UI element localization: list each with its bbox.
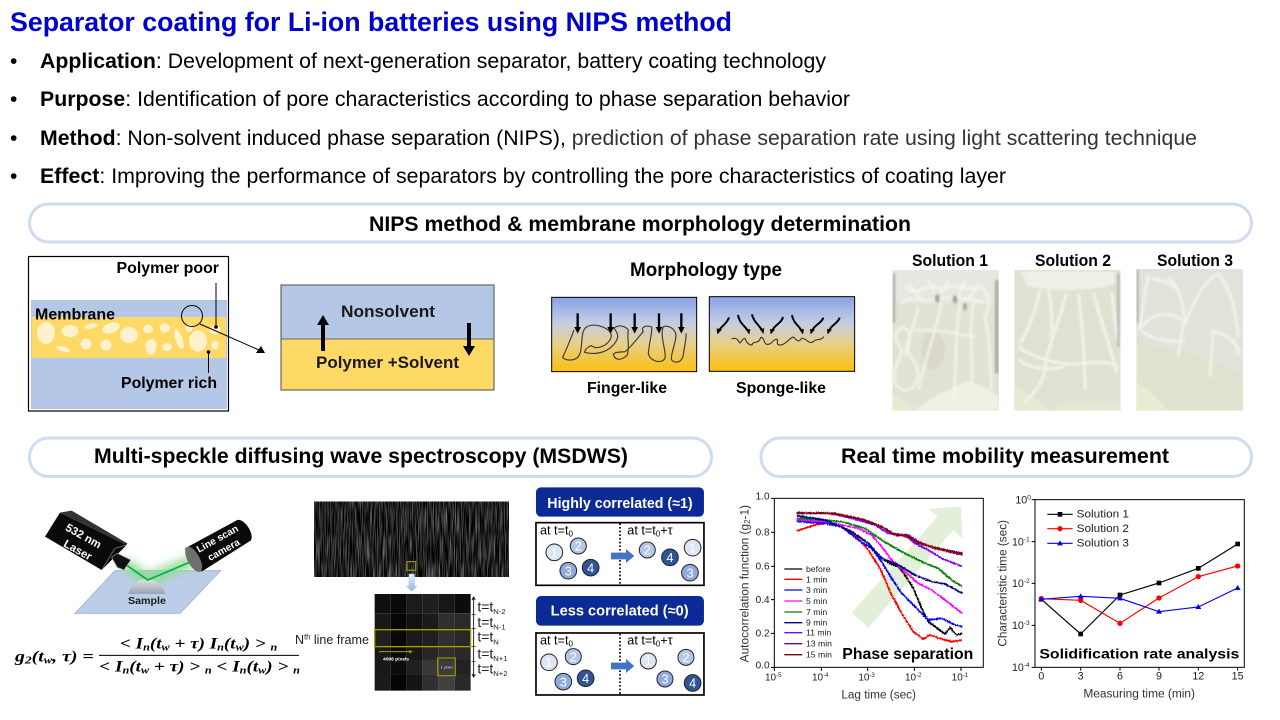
time labels: t=t [477,645,493,661]
correlation equation: < I [212,659,241,676]
y tick labels: 10 [1012,578,1024,590]
label: less correlated: Less correlated (≈0) [551,604,689,620]
correlation equation: n [143,642,150,653]
correlation equation: < I [99,659,118,676]
x tick labels: -1 [963,673,969,679]
pixel grid [375,594,471,691]
correlation equation: g [15,649,23,666]
correlation equation: , τ) = [51,649,94,666]
axes [1032,500,1244,671]
bullet: method: • [10,127,17,150]
light glow [124,560,195,580]
solution labels: Solution 1 [912,252,988,270]
arrow: phase separation trend [852,507,962,628]
correlation equation: ) > [264,659,293,676]
x tick labels: 0 [1038,671,1044,683]
chart: characteristic time [995,494,1244,701]
box: highly correlated particles: 1 [551,546,558,560]
correlation equation: (t [32,649,45,666]
camera body: Line scan [195,523,241,555]
box: less correlated particles: 2 [682,651,689,665]
box: less correlated particles: 3 [560,675,567,689]
correlation equation: w [162,642,170,653]
axis titles: Measuring time (min) [1083,687,1195,701]
laser body: Laser [61,538,94,564]
camera body [182,520,252,575]
y tick labels: -3 [1024,620,1030,627]
label: highly correlated: Highly correlated (≈1) [547,496,693,512]
x tick labels: 10 [905,673,916,684]
axis titles: Lag time (sec) [841,687,916,701]
finger-like morphology [552,297,697,372]
box: highly correlated particles: 3 [686,566,693,580]
sample droplet [128,579,165,594]
y tick labels: 0 [1027,494,1031,501]
bullet: purpose: • [10,88,17,111]
axis titles: 2 [743,519,752,524]
membrane diagram: Polymer rich [121,375,217,392]
legend: before [806,564,831,574]
solution labels: Solution 3 [1157,252,1233,270]
correlation equation: (t [224,635,236,652]
y tick labels: -4 [1024,662,1030,669]
correlation equation: n [122,666,130,677]
correlation equation: n [271,642,278,653]
solution labels: Solution 2 [1035,252,1111,270]
x tick labels: -3 [869,673,875,679]
box: highly correlated particles: 4 [666,551,673,565]
sample label: Sample [128,596,166,607]
x tick labels: 10 [812,673,823,684]
y tick labels: -2 [1024,578,1030,585]
section heading: NIPS method [30,204,1252,242]
correlation panels [536,487,704,695]
time labels: N-2 [493,607,506,616]
box: highly correlated particles: at t=t [627,523,656,537]
x tick labels: 6 [1117,671,1123,683]
photo: solution 2 [1014,270,1121,411]
correlation equation: + τ) I [170,635,218,652]
y tick labels: 10 [1012,620,1024,632]
axis titles: -1) [737,505,751,519]
time brackets [472,597,476,677]
section heading: NIPS method: NIPS method & membrane morphology determination [369,213,911,236]
box: less correlated particles: 2 [570,650,577,664]
x tick labels: 12 [1192,671,1204,683]
y tick labels: 0.8 [756,528,770,539]
section heading: mobility: Real time mobility measurement [841,445,1169,468]
Nth line frame label: line frame [310,632,369,647]
y tick labels: 0.4 [756,595,770,606]
legend: 3 min [806,585,827,595]
section heading: MSDWS [30,438,712,476]
x tick labels: 9 [1156,671,1162,683]
time labels: N [493,637,499,646]
legend: 5 min [806,596,827,606]
sponge-like morphology [709,297,855,371]
MSDWS setup illustration [45,511,252,613]
chart caption: Solidification rate analysis [1039,645,1240,661]
y tick labels: 10 [1012,536,1024,548]
x tick labels: 15 [1232,671,1244,683]
box: less correlated particles: 0 [656,639,661,648]
y tick labels: 0.6 [756,562,770,573]
correlation equation: (t [129,659,142,676]
photo: solution 3 [1136,269,1243,411]
membrane diagram: Membrane [35,306,115,324]
correlation equation: n [240,666,247,677]
correlation equation: (t [150,635,162,652]
correlation equation: n [205,666,212,677]
selected region marker [407,562,416,570]
bullet: effect: Effect: Improving the performance of separators by controlling the pore characteristics of coating layer [40,165,1006,188]
legend [784,564,832,660]
y tick labels: 0.0 [756,661,770,672]
title: Separator coating for Li-ion batteries using NIPS method [10,7,732,37]
x tick labels: -5 [776,673,782,679]
box: highly correlated particles: 0 [656,529,661,538]
photo: solution 1 [892,270,999,411]
solution labels [912,252,1233,270]
box: less correlated particles: 1 [545,656,552,670]
x tick labels [1038,671,1244,683]
legend: 7 min [806,607,827,617]
laser beam [124,560,195,580]
time labels: N-1 [493,623,506,632]
box: less correlated particles: 3 [661,673,668,687]
correlation equation: w [258,666,267,677]
interface diagram: Nonsolvent [341,303,436,321]
pixel grid: 1 pixel [441,664,453,669]
correlation equation: < I [120,635,139,652]
box: less correlated particles: 1 [645,655,652,669]
speckle image [314,502,509,577]
curves [797,513,962,642]
axes [771,498,983,671]
bullet: method: Method: Non-solvent induced phase separation (NIPS), prediction of phase separation rate using light scattering technique [40,127,1197,150]
time labels: N+2 [493,669,508,678]
chart: autocorrelation [737,492,983,701]
box: less correlated particles [536,633,704,695]
x tick labels: -2 [916,673,922,679]
x tick labels [765,673,969,684]
axis titles: Characteristic time (sec) [995,520,1009,647]
correlation equation: ) > [241,635,271,652]
y tick labels: 10 [1012,662,1024,674]
section heading: mobility [761,438,1252,476]
box: less correlated particles: +τ [660,633,673,647]
box: less correlated particles: at t=t [540,633,568,647]
series: solution 3 [1038,585,1241,614]
speckle pattern panel [295,502,509,691]
box: highly correlated particles: at t=t [540,523,568,537]
box: less correlated particles: at t=t [627,633,656,647]
y tick labels [1012,494,1031,674]
label: highly correlated [536,487,704,517]
box: highly correlated particles: 0 [568,529,573,538]
camera body: camera [206,537,242,564]
legend: Solution 2 [1077,523,1129,535]
interface diagram [281,285,494,390]
correlation equation: w [44,656,53,667]
correlation equation: n [293,666,301,677]
arrow: magnify [406,574,417,591]
bullet: purpose: Purpose: Identification of pore characteristics according to phase separation behavior [40,88,850,111]
morphology captions: Sponge-like [736,380,826,397]
box: less correlated particles: 4 [582,672,589,686]
box: highly correlated particles: 3 [565,564,572,578]
morphology captions [587,380,826,397]
time labels: t=t [477,660,493,676]
legend: 13 min [806,639,832,649]
legend: 1 min [806,574,827,584]
x tick labels: 10 [858,673,869,684]
Nth line frame label: th [304,632,310,641]
bullet: application: • [10,50,17,73]
box: less correlated particles: 0 [568,639,573,648]
label: less correlated [536,596,704,626]
morphology type heading: Morphology type [630,260,782,281]
correlation equation [14,635,301,677]
axis titles [995,520,1195,701]
membrane diagram: Polymer poor [116,260,219,277]
box: highly correlated particles: +τ [660,523,673,537]
legend: Solution 1 [1077,509,1129,521]
time labels: t=t [477,614,493,630]
series: solution 2 [1039,563,1240,626]
legend: 9 min [806,618,827,628]
morphology captions: Finger-like [587,380,667,397]
laser body [45,511,131,570]
correlation equation: w [236,642,244,653]
time labels [477,598,508,678]
interface diagram: Polymer +Solvent [316,354,460,372]
correlation equation: 2 [24,656,32,667]
box: highly correlated particles: 1 [689,541,696,555]
axis titles [737,505,916,701]
legend: 11 min [806,628,832,638]
correlation equation: n [217,642,224,653]
membrane diagram [28,256,228,411]
x tick labels: 10 [952,673,963,684]
sample stage [75,571,221,613]
y tick labels [756,492,770,672]
bullet: effect: • [10,165,17,188]
time labels: N+1 [493,654,508,663]
time labels: t=t [477,598,493,614]
box: highly correlated particles [536,523,704,585]
chart caption: Phase separation [842,646,973,663]
box: highly correlated particles: 2 [644,544,651,558]
laser body: 532 nm [63,522,103,551]
bullet: application: Application: Development of next-generation separator, battery coating technology [40,50,826,73]
arrow: zoom to interface [200,324,265,353]
y tick labels: 0.2 [756,629,770,640]
y tick labels: 1.0 [756,492,770,503]
correlation equation: w [141,666,150,677]
series: solution 1 [1039,542,1240,636]
y tick labels: 10 [1015,494,1027,506]
pixel grid: 4096 pixels [383,656,410,661]
bullet list [10,50,1197,188]
correlation equation: (t [246,659,259,676]
time labels: t=t [477,629,493,645]
Nth line frame label: N [295,632,305,647]
box: highly correlated particles: 2 [575,540,582,554]
legend [1047,509,1129,550]
x tick labels: -4 [823,673,829,679]
box: highly correlated particles: 4 [587,561,594,575]
y tick labels: -1 [1024,536,1030,543]
legend: Solution 3 [1077,538,1129,550]
section heading: MSDWS: Multi-speckle diffusing wave spectroscopy (MSDWS) [94,445,628,468]
axis titles: Autocorrelation function (g [737,522,751,662]
box: less correlated particles: 4 [689,677,696,691]
x tick labels: 3 [1078,671,1084,683]
legend: 15 min [806,650,832,660]
correlation equation: + τ) > [149,659,205,676]
x tick labels: 10 [765,673,776,684]
